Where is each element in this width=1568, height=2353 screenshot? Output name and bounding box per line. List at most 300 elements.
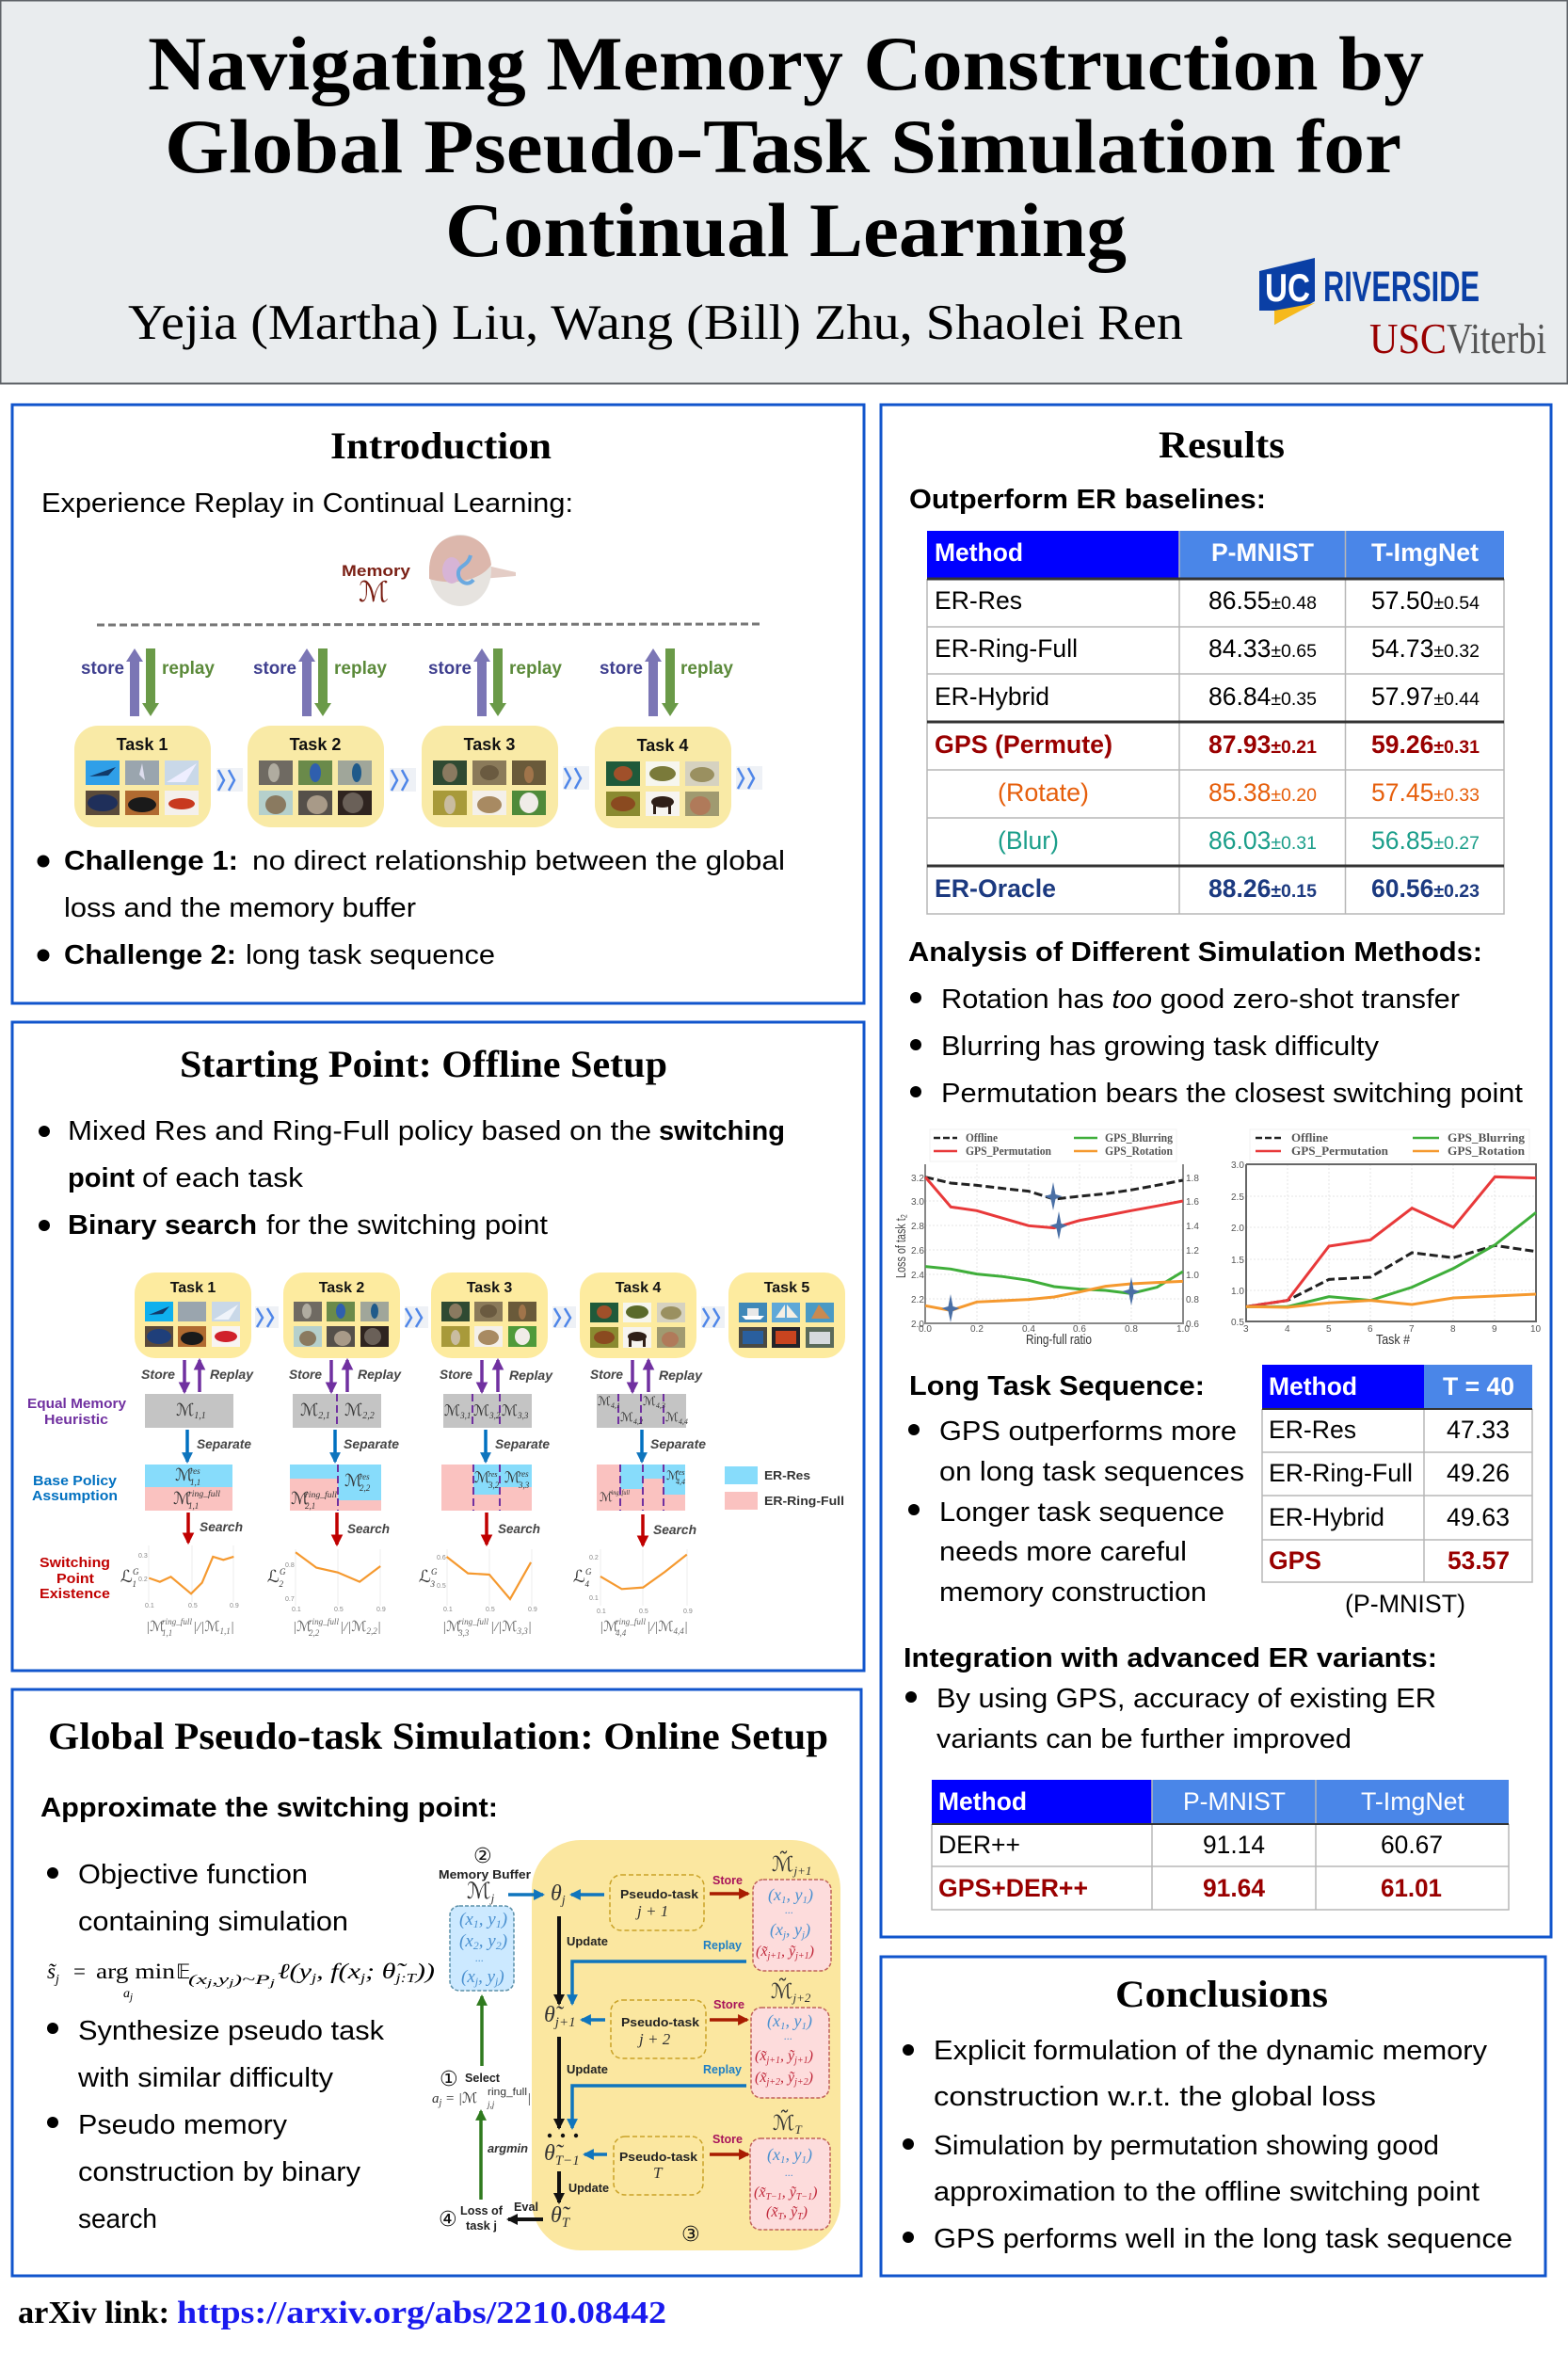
row: GPS Permute bbox=[935, 730, 1480, 759]
pseudo memory j+2: 1 bbox=[801, 2021, 807, 2032]
pseudo memory j+2: j+2 bbox=[792, 1991, 811, 2005]
store and replay labels: Store bbox=[713, 1997, 744, 2011]
pseudo memory T: T bbox=[777, 2212, 784, 2222]
pseudo memory j+1: j+1 bbox=[765, 1951, 781, 1961]
pseudo memory T: T−1 bbox=[796, 2192, 812, 2202]
subheading: approximate: Approximate the switching point: bbox=[40, 1793, 498, 1823]
row: Blur: (Blur) bbox=[998, 826, 1059, 855]
chevrons between tasks bbox=[216, 766, 762, 792]
small loss charts: G bbox=[431, 1567, 438, 1577]
pseudo memory j+1: ... bbox=[785, 1903, 793, 1916]
label: equal memory heuristic: Heuristic bbox=[44, 1412, 108, 1428]
chart: loss over tasks bbox=[1231, 1129, 1542, 1348]
label: switching point existence: Point bbox=[56, 1571, 94, 1587]
logo: USC Viterbi: Viterbi bbox=[1447, 314, 1546, 362]
formula: j bbox=[128, 1992, 133, 2003]
legend: base policies: ER-Ring-Full bbox=[764, 1494, 844, 1508]
store and replay labels: Replay bbox=[703, 2062, 743, 2076]
pseudo-task box j+1: Pseudo-task bbox=[620, 1887, 699, 1901]
row: base policy blocks: ℳ bbox=[344, 1471, 362, 1490]
chart 1 tick labels: 0.6 bbox=[1073, 1324, 1086, 1335]
task card 4: Task 4 bbox=[616, 1280, 661, 1296]
heading: conclusions: Conclusions bbox=[1115, 1973, 1328, 2015]
table: ER baselines: P-MNIST bbox=[1211, 538, 1314, 567]
pseudo memory T: ... bbox=[785, 2166, 793, 2179]
store arrows bbox=[710, 1894, 748, 2154]
pseudo memory T: T−1 bbox=[765, 2192, 782, 2202]
bullet: challenge 1: Challenge 1: bbox=[64, 846, 238, 876]
row: memory partitions: ℳ bbox=[344, 1401, 362, 1419]
formula: , f(x bbox=[316, 1960, 361, 1983]
bullet: synthesize: with similar difficulty bbox=[77, 2063, 334, 2093]
formula: j:T bbox=[393, 1972, 417, 1986]
small loss charts: 1,1 bbox=[162, 1628, 172, 1638]
row: memory partitions: ℳ bbox=[598, 1394, 611, 1408]
small loss charts: | bbox=[377, 1620, 381, 1635]
small loss charts: ℒ bbox=[573, 1567, 585, 1586]
chart 1 tick labels: 1.8 bbox=[1186, 1174, 1199, 1184]
table: advanced variants: DER++ bbox=[938, 1831, 1020, 1859]
label: equal memory heuristic bbox=[27, 1396, 127, 1428]
select step: ① bbox=[440, 2068, 458, 2091]
table: advanced variants bbox=[932, 1780, 1509, 1910]
row: store and replay arrows bbox=[141, 1360, 703, 1392]
row: memory partitions: 3,3 bbox=[517, 1411, 529, 1420]
row: memory partitions: 4,2 bbox=[633, 1417, 643, 1426]
pseudo memory j+2: j+2 bbox=[764, 2077, 780, 2088]
chart 1 legend: GPS_Blurring bbox=[1105, 1130, 1173, 1144]
formula: (x bbox=[188, 1973, 200, 1988]
table: advanced variants: 91.14 bbox=[1203, 1831, 1265, 1859]
arXiv link: arXiv link: bbox=[18, 2296, 169, 2330]
bullet: mixed policy: of each task bbox=[142, 1163, 304, 1193]
chart 1 tick labels: 1.0 bbox=[1186, 1271, 1199, 1281]
chart 2 tick labels: 7 bbox=[1409, 1324, 1415, 1335]
pseudo memory j+1: , y bbox=[786, 1920, 802, 1939]
pseudo memory T: T bbox=[795, 2122, 803, 2137]
chart 1 legend: GPS_Rotation bbox=[1105, 1144, 1174, 1158]
task card 3 bbox=[431, 1273, 548, 1358]
row: separate arrows bbox=[187, 1430, 706, 1462]
row: memory partitions: ℳ bbox=[643, 1394, 656, 1408]
pseudo memory j+2: (x̃ bbox=[755, 2070, 766, 2086]
bullet: integration bbox=[905, 1684, 1436, 1754]
table: long sequence T=40: 49.26 bbox=[1447, 1459, 1510, 1487]
step 3 marker: ③ bbox=[681, 2223, 700, 2247]
memory buffer: 1 bbox=[473, 1917, 479, 1930]
table: long sequence T=40: ER-Res bbox=[1269, 1416, 1356, 1444]
memory buffer: , y bbox=[479, 1931, 496, 1951]
caption: P-MNIST: (P-MNIST) bbox=[1345, 1590, 1465, 1618]
chart 1 tick labels: 0.4 bbox=[1022, 1324, 1035, 1335]
bullet: synthesize bbox=[47, 2016, 385, 2093]
task 4 card bbox=[595, 727, 731, 828]
pseudo memory T: ℳ̃ bbox=[773, 2111, 795, 2135]
row: memory partitions: 2,2 bbox=[362, 1411, 375, 1421]
formula: s̃ bbox=[47, 1960, 56, 1983]
chart 1 axis titles: Loss of task t₂ bbox=[893, 1214, 909, 1278]
small loss charts: |/|ℳ bbox=[340, 1620, 366, 1635]
bullets: analysis: Blurring has growing task difficulty bbox=[941, 1032, 1380, 1062]
pseudo memory j+2: j+2 bbox=[792, 2077, 808, 2088]
chart 2 legend: GPS_Blurring bbox=[1448, 1130, 1526, 1144]
row: search arrows: Search bbox=[498, 1521, 540, 1536]
chart 2 tick labels: 1.5 bbox=[1231, 1256, 1244, 1266]
bullet: integration: variants can be further improved bbox=[936, 1724, 1352, 1754]
arXiv link: https://arxiv.org/abs/2210.08442 bbox=[177, 2296, 666, 2330]
memory buffer bbox=[439, 1845, 531, 1991]
store and replay labels: Replay bbox=[703, 1938, 743, 1952]
store and replay arrows: replay bbox=[334, 659, 387, 679]
pseudo memory T: (x̃ bbox=[766, 2204, 777, 2220]
row: store and replay arrows: Store bbox=[590, 1367, 623, 1382]
small loss charts bbox=[120, 1545, 693, 1638]
formula: ; θ̃ bbox=[365, 1960, 408, 1983]
small loss charts: 3,3 bbox=[516, 1626, 528, 1636]
select step: ring_full bbox=[488, 2087, 527, 2098]
formula: j bbox=[226, 1977, 233, 1989]
memory buffer: ② bbox=[473, 1845, 492, 1868]
chart 2 legend: GPS_Permutation bbox=[1291, 1144, 1389, 1158]
bullet: pseudo memory bbox=[47, 2110, 361, 2234]
memory label: ℳ bbox=[359, 577, 389, 608]
bullets: long task sequence: memory construction bbox=[939, 1577, 1207, 1608]
row: memory partitions: 3,1 bbox=[459, 1411, 471, 1420]
replay lines and blue arrows bbox=[508, 1895, 746, 2154]
row: base policy blocks: 1,1 bbox=[188, 1501, 199, 1511]
pseudo memory j+2 bbox=[751, 1977, 829, 2098]
row: ER-Hybrid bbox=[935, 682, 1480, 711]
chart 2 tick labels: 9 bbox=[1492, 1324, 1497, 1335]
pseudo memory j+1: ) bbox=[804, 1920, 810, 1940]
small loss charts: 2 bbox=[279, 1579, 283, 1589]
chart 2 axes and gridlines bbox=[1246, 1164, 1536, 1321]
task card 2 bbox=[283, 1273, 400, 1358]
chart 1 tick labels: 3.2 bbox=[911, 1174, 924, 1184]
row: Rotate: (Rotate) bbox=[998, 778, 1089, 807]
small loss charts: 1,1 bbox=[219, 1626, 231, 1636]
pseudo memory T: , ỹ bbox=[782, 2185, 797, 2201]
pseudo memory T bbox=[750, 2109, 830, 2230]
pseudo-task box j+2: Pseudo-task bbox=[621, 2015, 700, 2029]
row: ER-Oracle: 60.56±0.23 bbox=[1371, 874, 1480, 903]
pseudo memory T: 1 bbox=[780, 2154, 785, 2166]
chart 1 axes and gridlines bbox=[925, 1164, 1183, 1323]
chart 2 legend bbox=[1250, 1129, 1529, 1161]
store and replay arrows: store bbox=[428, 659, 472, 679]
bullet: mixed policy: switching bbox=[659, 1116, 785, 1146]
pseudo memory j+2: , ỹ bbox=[780, 2070, 795, 2086]
memory buffer: (x bbox=[459, 1910, 473, 1929]
pseudo memory j+1: ) bbox=[807, 1885, 813, 1905]
row: memory partitions: ℳ bbox=[620, 1410, 633, 1424]
pseudo memory j+2: , y bbox=[785, 2011, 801, 2030]
row: Rotate: 57.45±0.33 bbox=[1371, 778, 1480, 807]
small loss charts: ring_full bbox=[616, 1617, 646, 1626]
yellow simulation area bbox=[532, 1840, 840, 2250]
memory buffer: 2 bbox=[496, 1939, 502, 1952]
store and replay arrows bbox=[81, 648, 733, 716]
formula: 𝔼 bbox=[176, 1961, 190, 1983]
row: separate arrows: Separate bbox=[197, 1436, 251, 1451]
table: advanced variants: Method bbox=[938, 1787, 1027, 1816]
row: memory partitions: ℳ bbox=[300, 1401, 318, 1419]
chart 1 tick labels: 1.4 bbox=[1186, 1222, 1199, 1232]
bullets: long task sequence: GPS outperforms more bbox=[939, 1417, 1237, 1447]
logo: USC Viterbi: USC bbox=[1369, 314, 1447, 362]
row: ER-Ring-Full bbox=[935, 634, 1480, 663]
formula: )~P bbox=[232, 1973, 270, 1988]
pseudo memory j+1: j+1 bbox=[793, 1951, 809, 1961]
small loss charts: ℒ bbox=[120, 1567, 133, 1586]
row: store and replay arrows: Store bbox=[289, 1367, 322, 1382]
chart 2 tick labels bbox=[1231, 1160, 1542, 1335]
loss step: Loss of bbox=[460, 2203, 504, 2217]
table: long sequence T=40: 53.57 bbox=[1448, 1546, 1510, 1575]
chart 2 tick labels: 6 bbox=[1368, 1324, 1373, 1335]
bullet: mixed policy bbox=[39, 1116, 785, 1193]
memory buffer: (x bbox=[461, 1967, 475, 1987]
loss step: task j bbox=[466, 2218, 497, 2233]
label: switching point existence bbox=[40, 1555, 110, 1602]
task 2 card: Task 2 bbox=[290, 735, 341, 754]
header banner bbox=[0, 0, 1568, 384]
bullet: challenge 1: no direct relationship between the global bbox=[252, 846, 785, 876]
table: long sequence T=40: ER-Ring-Full bbox=[1269, 1459, 1413, 1487]
store and replay arrows: store bbox=[600, 659, 643, 679]
row: base policy blocks: res bbox=[360, 1472, 370, 1481]
label: base policy assumption: Assumption bbox=[32, 1488, 118, 1504]
small loss charts: ring_full bbox=[458, 1617, 488, 1626]
small loss charts: |/|ℳ bbox=[647, 1620, 673, 1635]
bullet: explicit formulation: construction w.r.t. the global loss bbox=[934, 2082, 1376, 2112]
small loss charts: 0.5 bbox=[639, 1609, 648, 1615]
small loss charts: 0.1 bbox=[145, 1603, 154, 1609]
pseudo-task box T bbox=[614, 2137, 703, 2195]
chart 1 tick labels bbox=[911, 1174, 1199, 1335]
pseudo memory j+1: (x bbox=[768, 1885, 781, 1904]
memory buffer: ℳ bbox=[467, 1880, 491, 1904]
pseudo memory j+1: j bbox=[781, 1929, 786, 1941]
memory buffer: j bbox=[493, 1975, 499, 1988]
chart 2 tick labels: 3.0 bbox=[1231, 1160, 1244, 1171]
chart 2 tick labels: 0.5 bbox=[1231, 1318, 1244, 1328]
chart 1 tick labels: 3.0 bbox=[911, 1197, 924, 1208]
row: memory partitions bbox=[145, 1394, 688, 1428]
chart 2 tick labels: 10 bbox=[1530, 1324, 1542, 1335]
task card 5 bbox=[728, 1273, 845, 1358]
chart 1 lines bbox=[925, 1177, 1183, 1310]
formula: j bbox=[358, 1972, 365, 1986]
pseudo memory j+2: ) bbox=[806, 2011, 812, 2031]
loss step: ④ bbox=[439, 2208, 457, 2232]
arXiv link bbox=[18, 2296, 666, 2330]
row: memory partitions: ℳ bbox=[665, 1410, 679, 1424]
parameters theta: j bbox=[560, 1894, 566, 1908]
bullet: binary search: Binary search bbox=[68, 1210, 257, 1241]
pseudo memory j+1: j bbox=[800, 1929, 805, 1941]
task card 1: Task 1 bbox=[170, 1280, 216, 1296]
row: base policy blocks: ring_full bbox=[609, 1489, 630, 1497]
table: ER baselines bbox=[927, 531, 1504, 914]
formula: ℓ(y bbox=[278, 1960, 303, 1983]
formula: j bbox=[54, 1973, 59, 1987]
memory buffer: j bbox=[489, 1891, 495, 1905]
pseudo memory T: T bbox=[797, 2212, 804, 2222]
panel: Starting Point bbox=[12, 1022, 864, 1671]
title: Navigating Memory Construction by bbox=[148, 21, 1424, 106]
table: long sequence T=40: T = 40 bbox=[1443, 1372, 1514, 1401]
task 1 card bbox=[74, 726, 211, 827]
memory buffer: 1 bbox=[496, 1917, 502, 1930]
row: ER-Res bbox=[935, 586, 1480, 615]
row: memory partitions: 4,3 bbox=[656, 1401, 665, 1410]
table: long sequence T=40: 47.33 bbox=[1447, 1416, 1510, 1444]
parameters theta: θ̃ bbox=[551, 2203, 562, 2228]
chart 1 tick labels: 1.6 bbox=[1186, 1197, 1199, 1208]
row: Blur bbox=[998, 826, 1480, 855]
legend: base policies bbox=[725, 1466, 844, 1510]
parameters theta: T−1 bbox=[555, 2153, 580, 2169]
chart 1 tick labels: 0.2 bbox=[970, 1324, 984, 1335]
chart 1 tick labels: 2.0 bbox=[911, 1320, 924, 1330]
bullet: explicit formulation bbox=[903, 2036, 1488, 2112]
small loss charts: ℒ bbox=[419, 1567, 431, 1586]
row: base policy blocks: ℳ bbox=[291, 1489, 309, 1508]
memory buffer: j bbox=[473, 1975, 479, 1988]
row: base policy blocks: ℳ bbox=[666, 1468, 680, 1482]
row: separate arrows: Separate bbox=[495, 1436, 550, 1451]
store and replay arrows: replay bbox=[162, 659, 215, 679]
row: base policy blocks bbox=[145, 1465, 685, 1511]
chart 1 legend: Offline bbox=[966, 1130, 998, 1144]
row: base policy blocks: ℳ bbox=[474, 1470, 490, 1486]
task card 4 bbox=[580, 1273, 696, 1358]
parameters theta: θ̃ bbox=[544, 2141, 555, 2166]
bullet: challenge 2: long task sequence bbox=[246, 940, 495, 970]
pseudo memory j+2: j+1 bbox=[764, 2056, 780, 2066]
update labels: Update bbox=[568, 2181, 609, 2195]
bullet: mixed policy: Mixed Res and Ring-Full policy based on the bbox=[68, 1116, 651, 1146]
heading: results: Results bbox=[1159, 424, 1285, 466]
bullet: objective function: containing simulation bbox=[78, 1907, 348, 1937]
subheading: outperform: Outperform ER baselines: bbox=[909, 485, 1266, 515]
pseudo memory T: 1 bbox=[801, 2154, 807, 2166]
pseudo memory T: , y bbox=[785, 2145, 801, 2164]
row: store and replay arrows: Replay bbox=[659, 1368, 703, 1383]
small loss charts: ℒ bbox=[267, 1567, 280, 1586]
label: base policy assumption: Base Policy bbox=[33, 1473, 118, 1489]
heading: global simulation: Global Pseudo-task Simulation: Online Setup bbox=[48, 1715, 828, 1757]
bullet: explicit formulation: Explicit formulation of the dynamic memory bbox=[934, 2036, 1488, 2066]
pseudo memory j+1: (x̃ bbox=[756, 1944, 767, 1960]
small loss charts: 0.8 bbox=[285, 1562, 295, 1569]
bullet: binary search: for the switching point bbox=[266, 1210, 548, 1241]
bullets: analysis: Permutation bears the closest switching point bbox=[941, 1079, 1523, 1109]
row: GPS Permute: 87.93±0.21 bbox=[1208, 730, 1317, 759]
small loss charts: 2,2 bbox=[309, 1628, 320, 1638]
small loss charts: 0.9 bbox=[230, 1603, 239, 1609]
small loss charts: 0.5 bbox=[188, 1603, 198, 1609]
store and replay labels: Store bbox=[712, 1873, 743, 1887]
table: advanced variants: 91.64 bbox=[1203, 1874, 1265, 1902]
table: advanced variants: P-MNIST bbox=[1183, 1787, 1286, 1816]
row: Blur: 86.03±0.31 bbox=[1208, 826, 1317, 855]
memory buffer: ) bbox=[501, 1931, 507, 1951]
chart 1 tick labels: 0.8 bbox=[1186, 1295, 1199, 1305]
parameters theta: θ bbox=[551, 1881, 562, 1906]
small loss charts: 0.9 bbox=[683, 1609, 693, 1615]
row: memory partitions: 2,1 bbox=[318, 1411, 330, 1421]
row: memory partitions: 1,1 bbox=[194, 1411, 206, 1421]
small loss charts: 3 bbox=[429, 1579, 435, 1589]
chart 1 tick labels: 2.4 bbox=[911, 1271, 924, 1281]
parameters theta bbox=[544, 1881, 580, 2231]
row: store and replay arrows: Store bbox=[141, 1367, 175, 1382]
pseudo memory j+1: ℳ̃ bbox=[772, 1852, 794, 1876]
legend: base policies: ER-Res bbox=[764, 1468, 810, 1482]
small loss charts: 1 bbox=[132, 1579, 136, 1589]
pseudo memory j+1: 1 bbox=[802, 1895, 808, 1906]
select step: Select bbox=[465, 2071, 501, 2085]
pseudo memory j+2: ... bbox=[784, 2029, 792, 2042]
small loss charts: |/|ℳ bbox=[490, 1620, 517, 1635]
bullet: objective function: Objective function bbox=[78, 1860, 308, 1890]
chart 2 legend: Offline bbox=[1291, 1130, 1328, 1144]
row: base policy blocks: 3,3 bbox=[518, 1481, 530, 1490]
title bbox=[148, 21, 1424, 273]
table: advanced variants: GPS+DER++ bbox=[938, 1874, 1088, 1902]
small loss charts: 0.1 bbox=[597, 1609, 606, 1615]
chart 2 tick labels: 1.0 bbox=[1231, 1287, 1244, 1297]
chart 2 lines bbox=[1246, 1176, 1536, 1307]
row: store and replay arrows: Replay bbox=[210, 1367, 254, 1382]
bullet: mixed policy: point bbox=[68, 1163, 135, 1193]
chart 2 tick labels: 4 bbox=[1285, 1324, 1290, 1335]
pseudo memory j+2: (x̃ bbox=[755, 2048, 766, 2064]
bullet: challenge 2: Challenge 2: bbox=[64, 940, 236, 970]
table: long sequence T=40: 49.63 bbox=[1447, 1503, 1510, 1531]
panel: Introduction bbox=[12, 405, 864, 1003]
select step: a bbox=[432, 2091, 439, 2106]
small loss charts: 0.1 bbox=[589, 1595, 599, 1602]
small loss charts: |ℳ bbox=[146, 1620, 165, 1635]
chart 1 tick labels: 0.6 bbox=[1186, 1320, 1199, 1330]
chart 2 axis title: Task # bbox=[1376, 1332, 1411, 1348]
small loss charts: ring_full bbox=[309, 1617, 339, 1626]
small loss charts: |ℳ bbox=[600, 1620, 618, 1635]
bullet: binary search bbox=[39, 1210, 548, 1241]
small loss charts: | bbox=[684, 1620, 688, 1635]
row: GPS Permute: GPS (Permute) bbox=[935, 730, 1112, 759]
small loss charts: 0.9 bbox=[528, 1607, 537, 1613]
chart 1 legend: GPS_Permutation bbox=[966, 1144, 1052, 1158]
formula: j bbox=[204, 1977, 212, 1989]
bullets: analysis bbox=[910, 984, 1523, 1109]
row: store and replay arrows: Replay bbox=[509, 1368, 553, 1383]
small loss charts: G bbox=[133, 1567, 139, 1577]
argmin label: argmin bbox=[488, 2141, 528, 2155]
memory buffer: (x bbox=[459, 1931, 473, 1951]
pseudo memory j+2: ) bbox=[808, 2048, 813, 2064]
row: base policy blocks: ring_full bbox=[188, 1489, 221, 1498]
row: ER-Hybrid: 57.97±0.44 bbox=[1371, 682, 1480, 711]
row: ER-Ring-Full: 54.73±0.32 bbox=[1371, 634, 1480, 663]
bullet: pseudo memory: search bbox=[78, 2204, 157, 2234]
task card 1 bbox=[135, 1273, 251, 1358]
bullet: GPS long task: GPS performs well in the long task sequence bbox=[934, 2224, 1512, 2254]
bullet: synthesize: Synthesize pseudo task bbox=[78, 2016, 385, 2046]
